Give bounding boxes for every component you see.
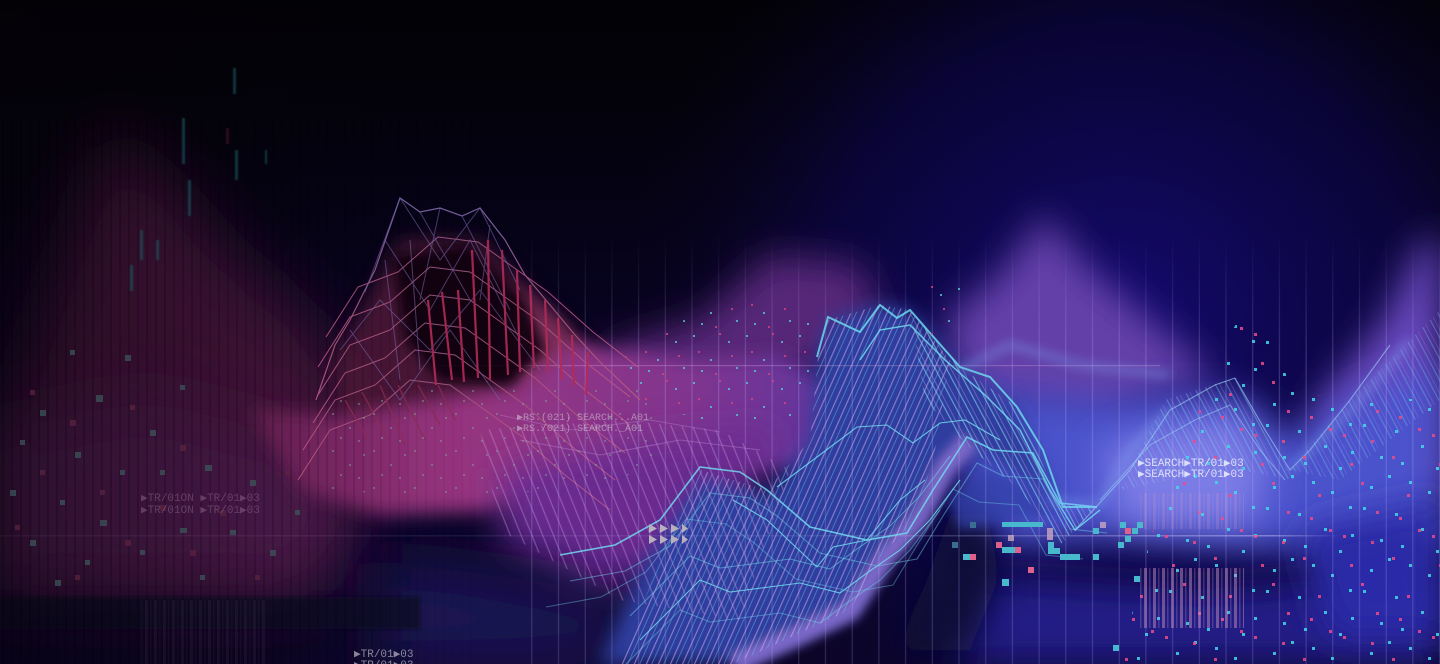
scatter: grey-green dust over pink fog xyxy=(330,380,660,500)
text: RS search readout: ▶RS.(021) SEARCH...A01 xyxy=(517,412,649,424)
text: search track readout xyxy=(1138,458,1244,481)
text: RS search readout: ▶RS./021) SEARCH._A01 xyxy=(517,423,643,435)
text: left track readout: ▶TR/01ON ▶TR/01▶03 xyxy=(141,505,260,517)
wireframe: blue wave mesh fills xyxy=(620,305,1440,664)
text: search track readout: ▶SEARCH▶TR/01▶03 xyxy=(1138,458,1244,470)
scatter: pink particles on right xyxy=(1120,298,1440,664)
scatter: dim pixel squares on the left xyxy=(10,350,300,586)
grid: vertical light streaks xyxy=(0,213,1440,664)
wireframe: blue wave ridges xyxy=(546,305,1390,664)
scatter: faint teal dots at upper left xyxy=(130,68,267,291)
wireframe: diagonal pink mesh xyxy=(480,415,790,620)
chart: dim barcode stripes xyxy=(140,600,266,664)
scatter: cyan particles on right xyxy=(1120,298,1440,664)
shadow: dark core of the pink mountain xyxy=(392,245,545,385)
glow: blurred blue band on right ridge xyxy=(960,340,1410,505)
icon: play triangles xyxy=(649,524,688,544)
scatter: fine particles above centre xyxy=(620,295,820,420)
chart: vertical barcode stripes xyxy=(1138,568,1244,628)
text: bottom track readout: ▶TR/01▶03 xyxy=(354,649,413,661)
text: RS search readout xyxy=(517,412,649,435)
wireframe: pink mountain xyxy=(298,198,640,510)
chart: upper barcode stripes xyxy=(1138,493,1244,529)
text: search track readout: ▶SEARCH▶TR/01▶03 xyxy=(1138,469,1244,481)
text: left track readout xyxy=(141,493,260,517)
scatter: fine particles above peak xyxy=(925,285,965,335)
text: left track readout: ▶TR/01ON ▶TR/01▶03 xyxy=(141,493,260,505)
scatter: pixel band under right peak xyxy=(952,522,1143,651)
